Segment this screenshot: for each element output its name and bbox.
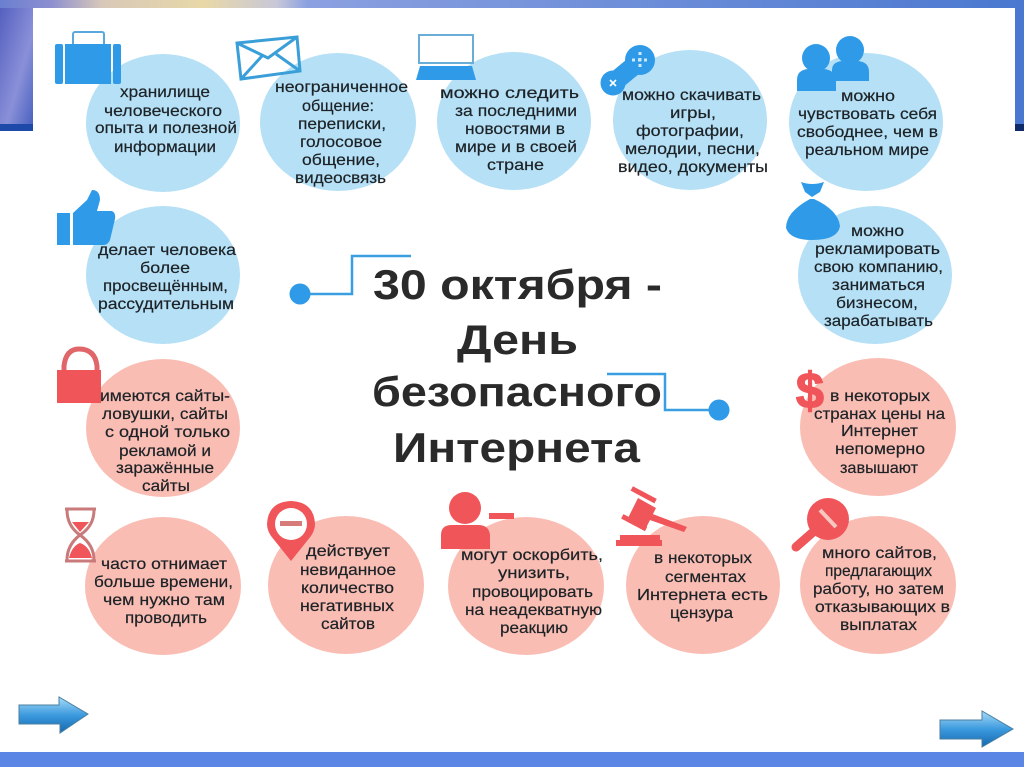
text: education: рассудительным	[98, 296, 234, 313]
decoration: right connector	[607, 374, 730, 420]
icon: dollar: $	[796, 363, 824, 419]
text: communication	[275, 79, 408, 187]
text: trap sites	[100, 388, 230, 495]
text: communication: голосовое	[300, 134, 382, 151]
text: trap sites: сайты	[142, 478, 190, 495]
text: censorship	[637, 550, 768, 622]
text: communication: общение:	[302, 98, 374, 115]
text: communication: видеосвязь	[295, 170, 386, 187]
text: prices: странах цены на	[814, 406, 945, 423]
text: job scams: работу, но затем	[813, 581, 944, 598]
text: job scams: предлагающих	[825, 563, 932, 580]
title	[372, 261, 662, 471]
text: news: за последними	[455, 103, 577, 120]
text: downloads: игры,	[670, 105, 716, 122]
text: time waste: часто отнимает	[101, 556, 228, 573]
icon: magnifier	[796, 498, 849, 547]
text: trap sites: рекламой и	[119, 443, 211, 460]
text: downloads: видео, документы	[618, 159, 768, 176]
text: censorship: Интернета есть	[637, 587, 768, 604]
text: job scams: выплатах	[840, 617, 917, 634]
panel: censorship	[616, 486, 780, 654]
text: trap sites: ловушки, сайты	[102, 406, 228, 423]
text: news: можно следить	[440, 85, 579, 102]
text: trap sites: имеются сайты-	[100, 388, 230, 405]
panel: prices	[796, 358, 956, 496]
text: business: свою компанию,	[814, 259, 943, 276]
text: business: рекламировать	[815, 241, 940, 258]
panel: trap sites	[57, 349, 240, 497]
icon: gavel	[616, 486, 687, 546]
text: business	[814, 223, 943, 330]
text: business: можно	[851, 223, 904, 240]
text: insults	[461, 547, 603, 637]
arrow: left navigation	[19, 697, 88, 733]
text: time waste: проводить	[125, 610, 207, 627]
text: prices: Интернет	[841, 423, 919, 440]
text: negative sites: негативных	[300, 598, 394, 615]
title: Интернета	[393, 424, 641, 471]
text: insults: на неадекватную	[465, 602, 602, 619]
text: insults: унизить,	[498, 565, 570, 582]
text: storage: опыта и полезной	[95, 120, 237, 137]
title: День	[457, 316, 578, 363]
icon: map pin	[267, 501, 315, 561]
panel: insults	[441, 492, 604, 655]
text: news	[440, 85, 579, 174]
text: storage: человеческого	[104, 103, 222, 120]
panel: news	[416, 35, 591, 190]
text: prices: непомерно	[835, 441, 925, 458]
icon: gamepad	[600, 45, 655, 96]
text: negative sites: количество	[301, 580, 394, 597]
text: negative sites: действует	[306, 543, 391, 560]
text: education: просвещённым,	[103, 278, 228, 295]
text: negative sites: сайтов	[321, 616, 375, 633]
text: job scams: отказывающих в	[815, 599, 950, 616]
text: censorship: цензура	[670, 605, 733, 622]
text: freedom: реальном мире	[805, 142, 929, 159]
text: communication: общение,	[302, 152, 380, 169]
text: negative sites	[300, 543, 396, 633]
text: communication: переписки,	[298, 116, 386, 133]
text: business: зарабатывать	[824, 313, 933, 330]
text: education: делает человека	[98, 242, 236, 259]
icon: people	[797, 36, 869, 91]
icon: envelope	[237, 37, 300, 79]
arrow: right navigation	[940, 711, 1013, 747]
text: downloads: фотографии,	[636, 123, 744, 140]
text: business: заниматься	[832, 277, 925, 294]
text: time waste: чем нужно там	[103, 592, 225, 609]
icon: laptop	[416, 35, 476, 80]
panel: time waste	[65, 509, 241, 655]
text: news: мире и в своей	[455, 139, 577, 156]
text: business: бизнесом,	[836, 295, 918, 312]
text: trap sites: с одной только	[105, 424, 230, 441]
icon: lock	[57, 349, 101, 403]
text: job scams: много сайтов,	[822, 545, 937, 562]
text: freedom	[797, 88, 938, 159]
panel: downloads	[600, 45, 768, 190]
title: 30 октября -	[373, 261, 662, 308]
text: downloads: можно скачивать	[622, 87, 761, 104]
text: insults: реакцию	[500, 620, 568, 637]
icon: thumbs up	[57, 190, 115, 245]
text: storage: хранилище	[120, 84, 210, 101]
text: censorship: сегментах	[665, 569, 746, 586]
icon: hourglass	[65, 509, 96, 561]
panel: freedom	[789, 36, 943, 191]
text: prices	[814, 388, 945, 477]
text: freedom: свободнее, чем в	[797, 124, 938, 141]
icon: person minus	[441, 492, 514, 549]
text: time waste	[94, 556, 233, 627]
text: prices: завышают	[840, 460, 919, 477]
text: storage: информации	[114, 139, 216, 156]
text: downloads: мелодии, песни,	[625, 141, 760, 158]
text: freedom: чувствовать себя	[798, 106, 937, 123]
icon: money bag	[786, 182, 840, 240]
text: storage	[95, 84, 237, 156]
text: downloads	[618, 87, 768, 176]
text: education: более	[140, 260, 190, 277]
panel: communication	[237, 37, 416, 191]
icon: suitcase	[55, 32, 121, 84]
panel: negative sites	[267, 501, 424, 654]
decoration: left connector	[290, 256, 411, 304]
text: education	[98, 242, 236, 313]
panel: job scams	[796, 498, 956, 654]
title: безопасного	[372, 368, 662, 415]
text: communication: неограниченное	[275, 79, 408, 96]
panel: business	[786, 182, 952, 344]
text: censorship: в некоторых	[654, 550, 752, 567]
text: job scams	[813, 545, 950, 634]
text: insults: могут оскорбить,	[461, 547, 603, 564]
text: news: стране	[487, 157, 544, 174]
text: news: новостями в	[465, 121, 565, 138]
text: freedom: можно	[841, 88, 895, 105]
text: insults: провоцировать	[472, 584, 593, 601]
panel: education	[57, 190, 240, 344]
text: time waste: больше времени,	[94, 574, 233, 591]
text: prices: в некоторых	[830, 388, 930, 405]
panel: storage of knowledge	[55, 32, 240, 192]
text: negative sites: невиданное	[300, 562, 396, 579]
text: trap sites: заражённые	[116, 460, 214, 477]
